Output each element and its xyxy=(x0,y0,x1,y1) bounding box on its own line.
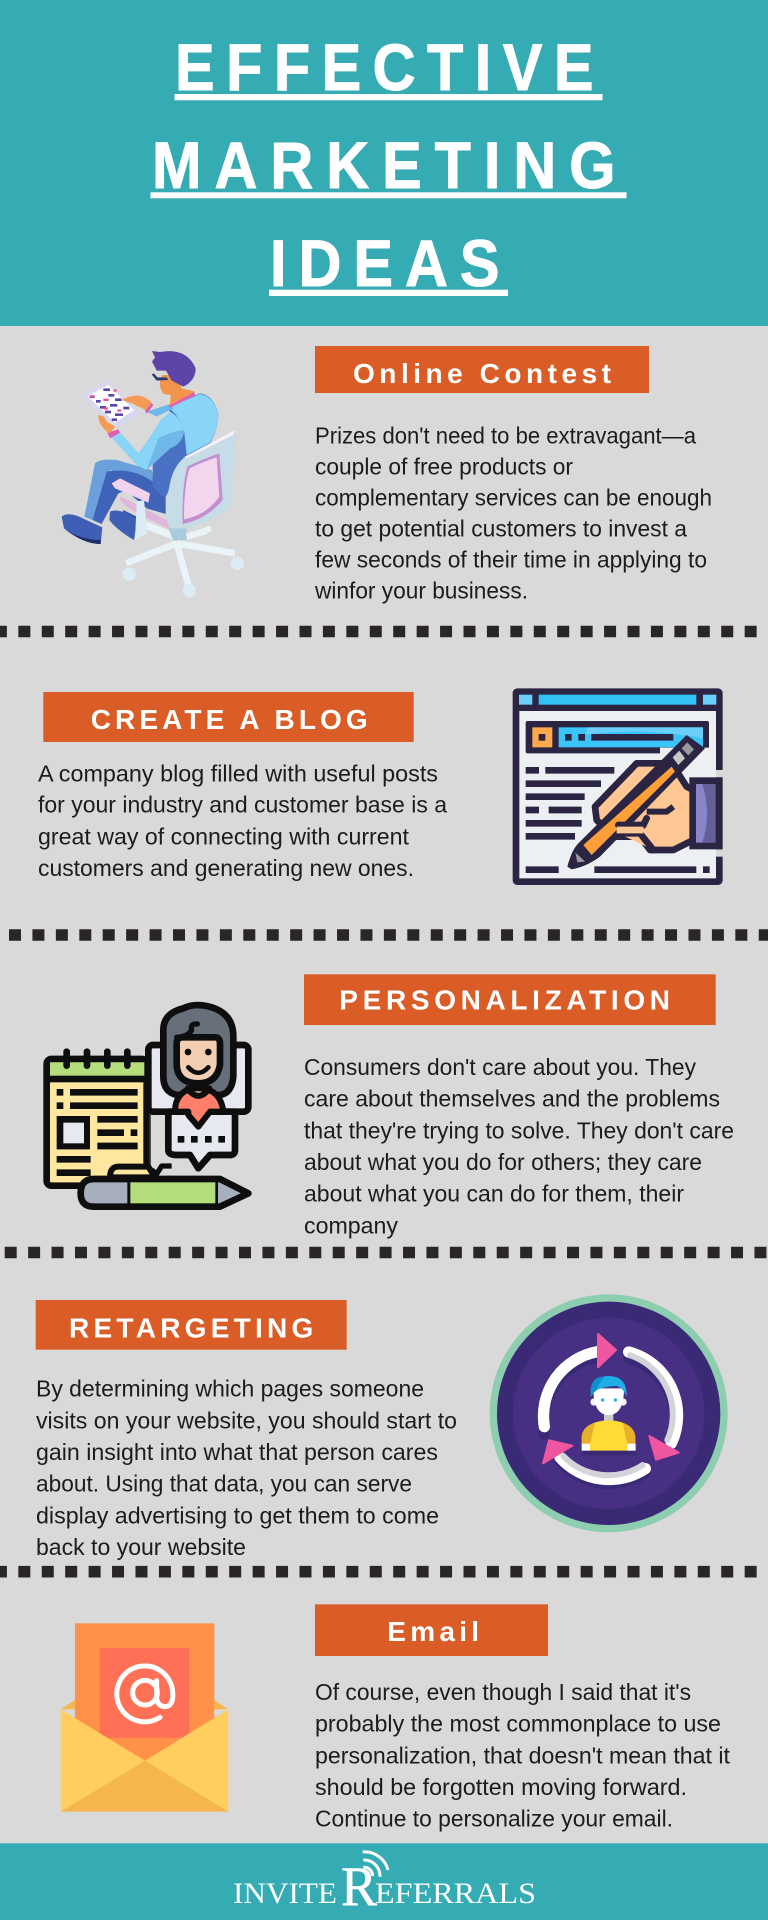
heading: create a blog xyxy=(43,692,414,742)
text: retargeting description: visits on your website, you should start to xyxy=(36,1407,457,1433)
text: email description: Continue to personalize your email. xyxy=(315,1806,673,1832)
text: retargeting description: back to your website xyxy=(36,1534,246,1560)
text: online contest description: to get potential customers to invest a xyxy=(315,515,687,541)
text: email description xyxy=(315,1679,731,1832)
title: Ideas: IDEAS xyxy=(270,227,500,301)
text: personalization description xyxy=(304,1054,734,1238)
cycle arcs xyxy=(543,1352,678,1484)
title: Effective: EFFECTIVE xyxy=(175,31,594,105)
text: personalization description: company xyxy=(304,1212,399,1238)
text: personalization description: Consumers don't care about you. They xyxy=(304,1054,696,1080)
text: blog description: great way of connecting with current xyxy=(38,823,410,849)
text: personalization description: that they're trying to solve. They don't care xyxy=(304,1117,734,1143)
panel: personalization xyxy=(47,974,734,1238)
title banner xyxy=(0,0,768,326)
heading: online contest: Online Contest xyxy=(353,358,611,389)
heading: retargeting: RETARGETING xyxy=(69,1313,313,1344)
panel: email xyxy=(61,1604,731,1832)
text: email description: should be forgotten moving forward. xyxy=(315,1774,687,1800)
icon: open envelope with @ letter xyxy=(61,1623,228,1812)
heading: personalization xyxy=(304,974,716,1025)
icon: notepad, avatar and pen xyxy=(47,1005,248,1207)
text: retargeting description: about. Using that data, you can serve xyxy=(36,1471,412,1497)
text: email description: Of course, even though I said that it's xyxy=(315,1679,691,1705)
arm xyxy=(109,412,184,470)
heading: email xyxy=(315,1604,548,1656)
heading: create a blog: CREATE A BLOG xyxy=(91,704,368,735)
panel: online contest xyxy=(62,346,712,604)
panel: create a blog xyxy=(38,692,723,882)
text: online contest description xyxy=(314,422,712,604)
text: online contest description: few seconds of their time in applying to xyxy=(315,546,707,572)
text: retargeting description xyxy=(36,1376,457,1560)
text: retargeting description: gain insight into what that person cares xyxy=(36,1439,438,1465)
text: email description: probably the most commonplace to use xyxy=(315,1711,721,1737)
chair base xyxy=(135,500,147,540)
icon: circular retargeting arrows around a person xyxy=(490,1294,728,1532)
heading: email: Email xyxy=(387,1616,479,1647)
text: retargeting description: display advertising to get them to come xyxy=(36,1502,439,1528)
head xyxy=(160,375,195,405)
text: online contest description: complementary services can be enough xyxy=(315,485,712,511)
icon: browser window with hand writing xyxy=(516,692,723,882)
logo: InviteReferrals: EFERRALS xyxy=(375,1877,536,1910)
text: blog description: for your industry and customer base is a xyxy=(38,792,447,818)
heading: online contest xyxy=(315,346,649,393)
logo: InviteReferrals xyxy=(233,1852,536,1918)
text: online contest description: winfor your business. xyxy=(314,578,528,604)
video card and avatar xyxy=(148,1045,248,1112)
shoes xyxy=(62,514,102,544)
text: blog description xyxy=(38,760,447,881)
person xyxy=(582,1376,636,1455)
chair back and seat xyxy=(120,496,171,529)
text: blog description: customers and generating new ones. xyxy=(38,855,414,881)
legs xyxy=(84,460,157,523)
hands xyxy=(98,415,115,433)
heading: retargeting xyxy=(36,1300,347,1350)
text: personalization description: about what you do for others; they care xyxy=(304,1149,702,1175)
notepad xyxy=(47,1059,147,1186)
footer band xyxy=(0,1843,768,1920)
heading: personalization: PERSONALIZATION xyxy=(339,984,670,1015)
text: email description: personalization, that doesn't mean that it xyxy=(315,1742,731,1768)
tablet xyxy=(81,380,141,428)
text: personalization description: about what you can do for them, their xyxy=(304,1181,684,1207)
torso xyxy=(153,393,218,498)
text: online contest description: Prizes don't need to be extravagant—a xyxy=(315,422,696,448)
text: personalization description: care about themselves and the problems xyxy=(304,1086,720,1112)
text: retargeting description: By determining which pages someone xyxy=(36,1376,424,1402)
panel: retargeting xyxy=(36,1294,728,1560)
text: blog description: A company blog filled with useful posts xyxy=(38,760,438,786)
title: Marketing: MARKETING xyxy=(152,129,616,203)
icon: man on office chair with tablet xyxy=(62,351,244,597)
logo: InviteReferrals: R xyxy=(341,1856,378,1918)
text: online contest description: couple of free products or xyxy=(315,453,573,479)
icon: wifi arcs xyxy=(363,1852,388,1877)
pen xyxy=(81,1179,248,1207)
arrowheads xyxy=(598,1334,616,1367)
logo: InviteReferrals: INVITE xyxy=(233,1877,337,1910)
